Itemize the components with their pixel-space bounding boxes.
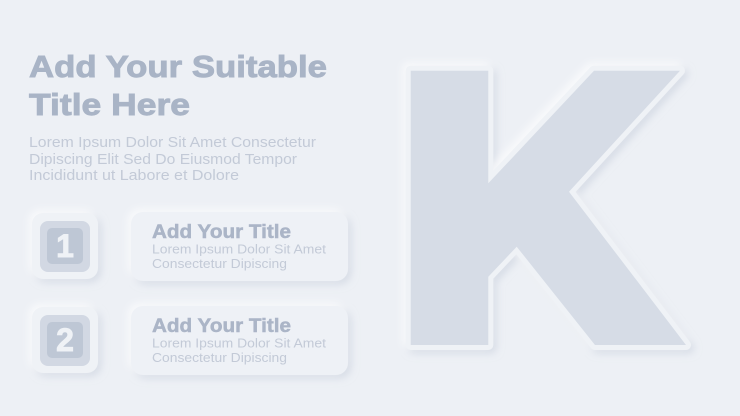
title: [29, 49, 327, 122]
intro paragraph: Lorem Ipsum Dolor Sit Amet Consectetur: [29, 135, 316, 151]
card 2 text: Consectetur Dipiscing: [152, 350, 287, 365]
card 2 heading: Add Your Title: [152, 316, 291, 337]
title: Add Your Suitable: [29, 49, 327, 84]
card 2 text: [152, 336, 326, 365]
large letter K: [411, 71, 686, 345]
card 1 text: Lorem Ipsum Dolor Sit Amet: [152, 242, 326, 256]
number badge 1: 1: [56, 228, 74, 264]
card 2 text: Lorem Ipsum Dolor Sit Amet: [152, 336, 326, 350]
card 1 text: [152, 242, 326, 271]
intro paragraph: Dipiscing Elit Sed Do Eiusmod Tempor: [29, 152, 297, 168]
intro paragraph: [29, 135, 316, 184]
card 1 text: Consectetur Dipiscing: [152, 256, 287, 271]
intro paragraph: Incididunt ut Labore et Dolore: [29, 168, 239, 184]
card 1: [131, 212, 348, 281]
card 1 heading: Add Your Title: [152, 222, 291, 243]
card 2: [131, 306, 348, 375]
title: Title Here: [29, 87, 190, 122]
number badge 1: [32, 213, 98, 279]
number badge 2: 2: [56, 322, 74, 358]
number badge 2: [32, 307, 98, 373]
